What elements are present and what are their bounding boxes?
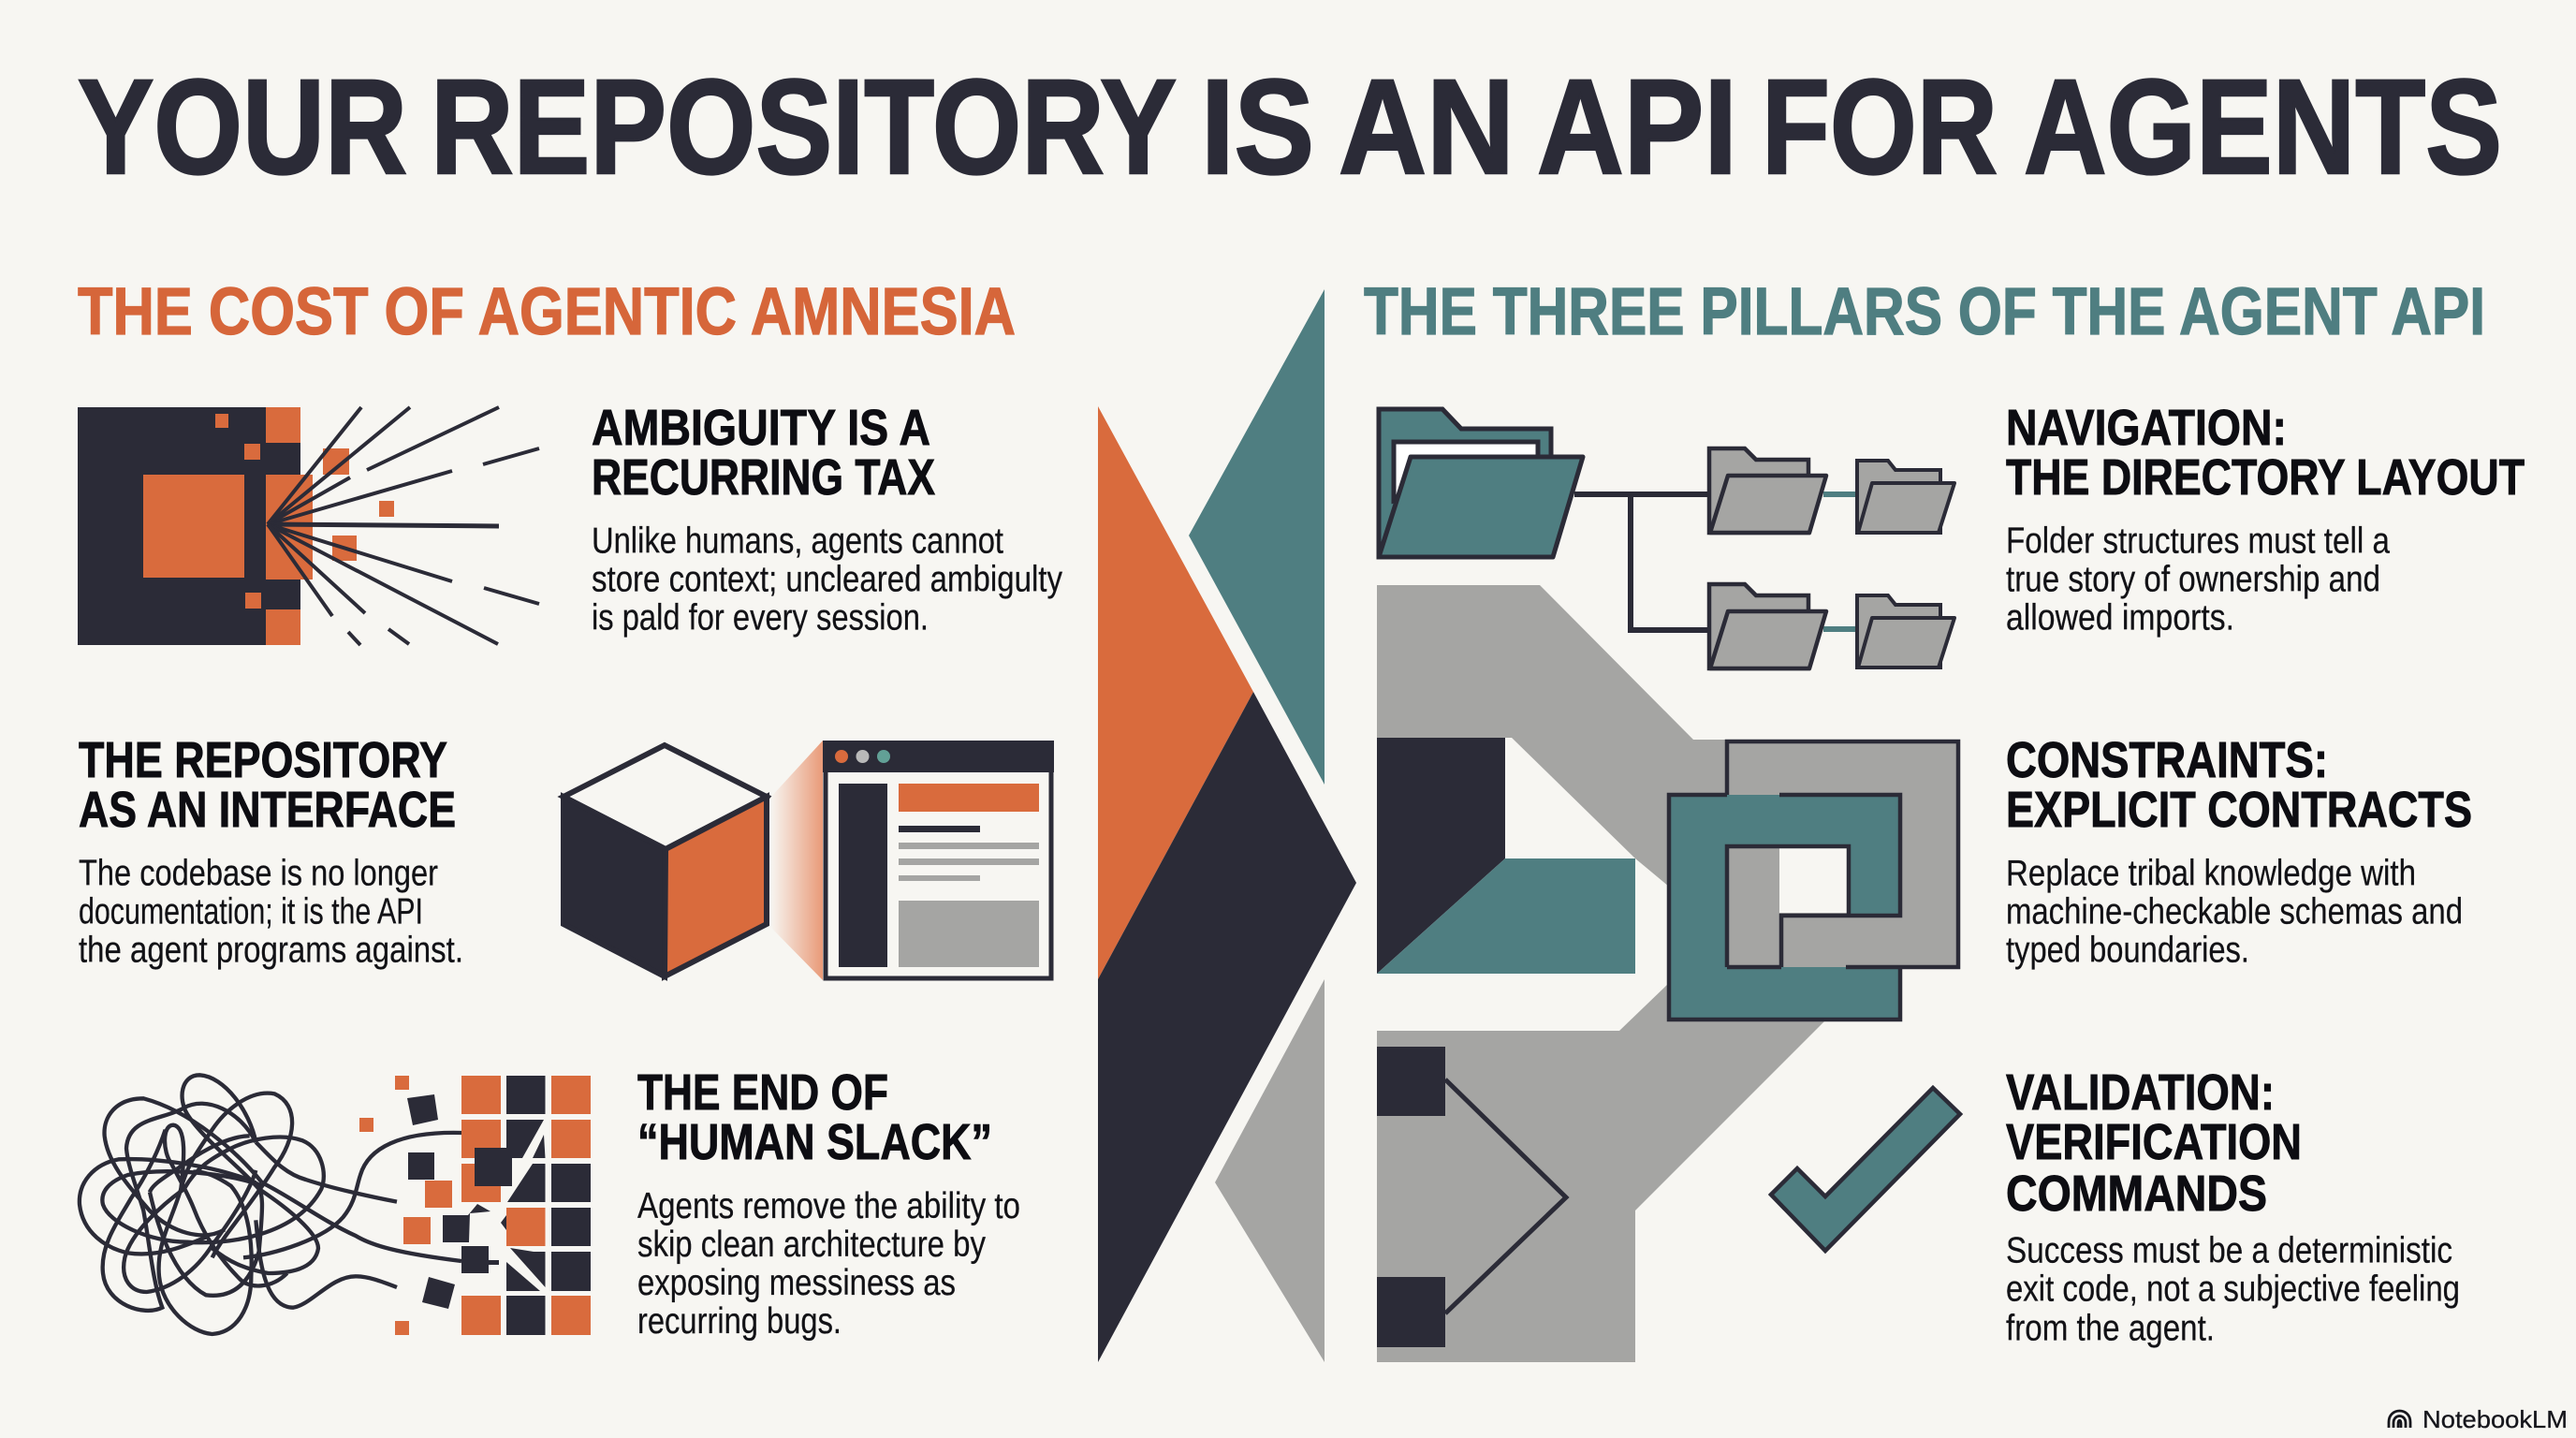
icon: gray folder top <box>1709 448 1826 533</box>
panel: the repository as an interface <box>79 732 1054 980</box>
icon: interlocking squares <box>1669 741 1958 1020</box>
text: human slack block: exposing messiness as <box>637 1263 956 1303</box>
text: constraints block: typed boundaries. <box>2006 931 2249 970</box>
text: repository block: THE REPOSITORY <box>79 732 447 788</box>
icon: flow nodes <box>1377 1047 1566 1347</box>
central arrow motif <box>1098 289 1356 1362</box>
panel: ambiguity is a recurring tax <box>78 400 1062 645</box>
icon: cube <box>564 745 767 976</box>
text: validation block <box>2006 1064 2460 1348</box>
icon: breaking grid <box>359 1076 591 1335</box>
arrow: teal triangle <box>1189 289 1325 785</box>
text: human slack block: Agents remove the ability to <box>637 1186 1020 1226</box>
text: human slack block: “HUMAN SLACK” <box>637 1114 992 1170</box>
text: constraints block: CONSTRAINTS: <box>2006 732 2328 788</box>
text: ambiguity block: AMBIGUITY IS A <box>592 400 930 456</box>
brand: NotebookLM: NotebookLM <box>2422 1405 2568 1433</box>
panel: constraints <box>1377 732 2472 1020</box>
title: IS <box>1201 51 1314 202</box>
icon: dark and teal wedge <box>1377 738 1635 974</box>
icon: interface window <box>823 741 1054 978</box>
text: human slack block <box>637 1064 1020 1342</box>
title: FOR <box>1762 51 1998 202</box>
text: navigation block: true story of ownership and <box>2006 560 2380 599</box>
text: repository block <box>79 732 463 970</box>
heading: the cost of agentic amnesia: THE COST OF AGENTIC AMNESIA <box>78 275 1016 349</box>
connector lines <box>1574 494 1856 630</box>
text: navigation block: allowed imports. <box>2006 597 2234 638</box>
title: YOUR <box>78 51 407 202</box>
icon: tangled line <box>80 1075 461 1334</box>
text: constraints block <box>2006 732 2472 970</box>
text: ambiguity block: store context; uncleared ambigulty <box>592 560 1062 599</box>
text: navigation block: Folder structures must tell a <box>2006 521 2390 562</box>
text: ambiguity block: is pald for every session. <box>592 597 929 638</box>
text: navigation block <box>2006 400 2525 638</box>
arrow: orange triangle <box>1098 406 1253 979</box>
panel: validation <box>1377 1047 2460 1348</box>
title: API <box>1537 51 1737 202</box>
title: AGENTS <box>2024 51 2502 202</box>
text: ambiguity block: Unlike humans, agents cannot <box>592 521 1003 562</box>
panel: navigation <box>1379 400 2525 668</box>
text: validation block: VERIFICATION <box>2006 1114 2302 1170</box>
text: repository block: documentation; it is the API <box>79 891 423 932</box>
text: ambiguity block: RECURRING TAX <box>592 449 935 506</box>
projection beam <box>770 741 823 980</box>
text: human slack block: THE END OF <box>637 1064 888 1121</box>
text: ambiguity block <box>592 400 1062 638</box>
text: validation block: from the agent. <box>2006 1309 2215 1348</box>
text: validation block: exit code, not a subjective feeling <box>2006 1269 2460 1309</box>
icon: gray folder bottom <box>1709 584 1826 668</box>
title <box>78 51 2502 202</box>
text: validation block: Success must be a deterministic <box>2006 1230 2452 1271</box>
title: REPOSITORY <box>431 51 1177 202</box>
icon: check mark <box>1771 1088 1960 1251</box>
text: navigation block: NAVIGATION: <box>2006 400 2287 456</box>
text: repository block: the agent programs against. <box>79 931 463 970</box>
text: repository block: The codebase is no longer <box>79 854 438 893</box>
gray backdrop connecting pillars <box>1377 585 1825 1362</box>
icon: small gray folder top <box>1857 461 1954 533</box>
text: human slack block: recurring bugs. <box>637 1301 842 1342</box>
icon: large teal folder <box>1379 409 1583 557</box>
text: repository block: AS AN INTERFACE <box>79 782 456 838</box>
text: constraints block: Replace tribal knowledge with <box>2006 854 2416 893</box>
text: validation block: COMMANDS <box>2006 1166 2267 1222</box>
text: human slack block: skip clean architecture by <box>637 1225 986 1265</box>
text: constraints block: EXPLICIT CONTRACTS <box>2006 782 2472 838</box>
icon: small gray folder bottom <box>1857 595 1954 668</box>
arrow: dark chevron <box>1098 692 1356 1362</box>
text: validation block: VALIDATION: <box>2006 1064 2275 1121</box>
icon: shattering block with rays <box>78 407 539 645</box>
panel: the end of human slack <box>80 1064 1020 1342</box>
icon: folder tree <box>1379 409 1954 668</box>
title: AN <box>1339 51 1515 202</box>
text: constraints block: machine-checkable schemas and <box>2006 891 2463 932</box>
arrow: gray triangle <box>1215 979 1325 1362</box>
